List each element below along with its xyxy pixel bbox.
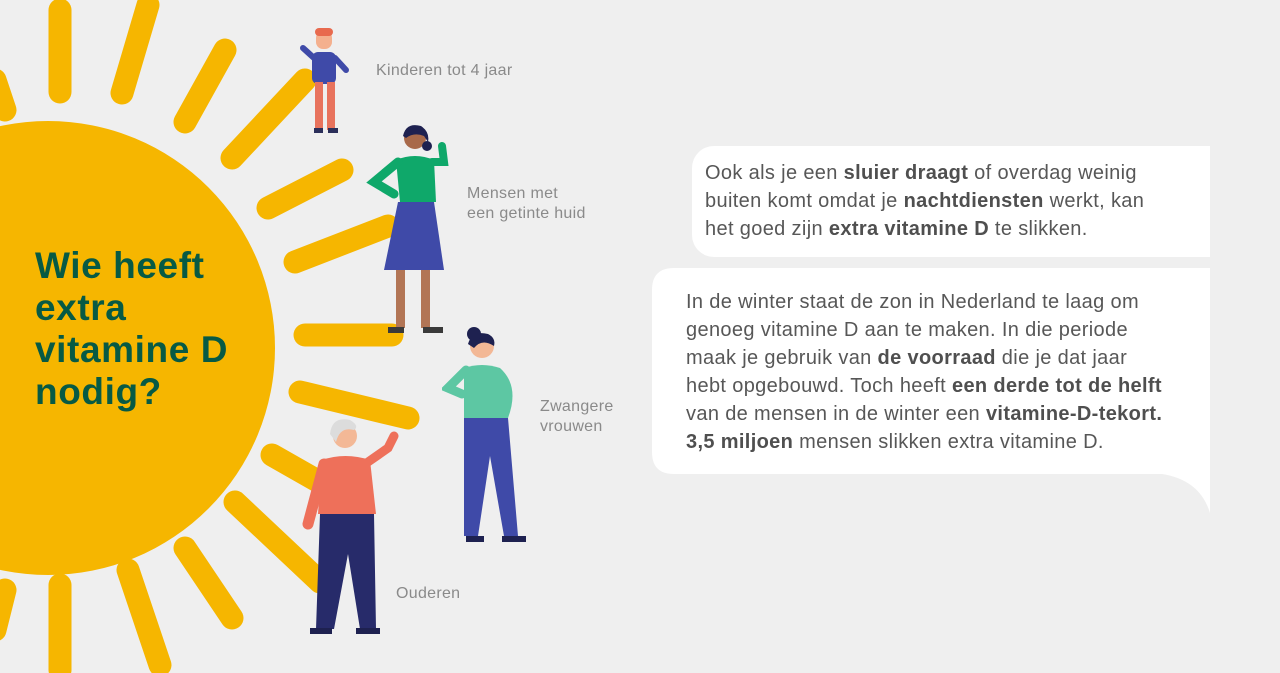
figure: pregnant woman <box>442 327 526 542</box>
speech bubble 2: In de winter staat de zon in Nederland te laag om <box>686 291 1139 313</box>
speech bubble 2: maak je gebruik van de voorraad die je dat jaar <box>686 347 1127 369</box>
title: vitamine D <box>35 329 228 370</box>
label: zwangere vrouwen <box>540 398 614 435</box>
speech bubble 2: hebt opgebouwd. Toch heeft een derde tot de helft <box>686 375 1162 397</box>
speech bubble 1: Ook als je een sluier draagt of overdag weinig <box>705 162 1137 184</box>
label: ouderen: Ouderen <box>396 585 460 602</box>
label: mensen met getinte huid: Mensen met <box>467 185 558 202</box>
title: Wie heeft <box>35 245 205 286</box>
speech bubble 1: buiten komt omdat je nachtdiensten werkt, kan <box>705 190 1144 212</box>
label: kinderen: Kinderen tot 4 jaar <box>376 62 512 79</box>
figure: elderly woman <box>302 419 398 634</box>
speech bubble 1 <box>692 146 1210 257</box>
label: mensen met getinte huid: een getinte huid <box>467 205 586 222</box>
label: zwangere vrouwen: vrouwen <box>540 418 603 435</box>
speech bubble 2 <box>652 268 1210 512</box>
title: extra <box>35 287 126 328</box>
label: zwangere vrouwen: Zwangere <box>540 398 614 415</box>
speech bubble 2: van de mensen in de winter een vitamine-D-tekort. <box>686 403 1162 425</box>
figure: child <box>300 28 349 133</box>
figure: woman with tinted skin <box>366 125 448 333</box>
title: nodig? <box>35 371 162 412</box>
title <box>35 245 228 412</box>
label: mensen met getinte huid <box>467 185 586 222</box>
speech bubble 2: 3,5 miljoen mensen slikken extra vitamine D. <box>686 431 1104 453</box>
speech bubble 2: genoeg vitamine D aan te maken. In die periode <box>686 319 1128 341</box>
speech bubble 1: het goed zijn extra vitamine D te slikken. <box>705 218 1088 240</box>
